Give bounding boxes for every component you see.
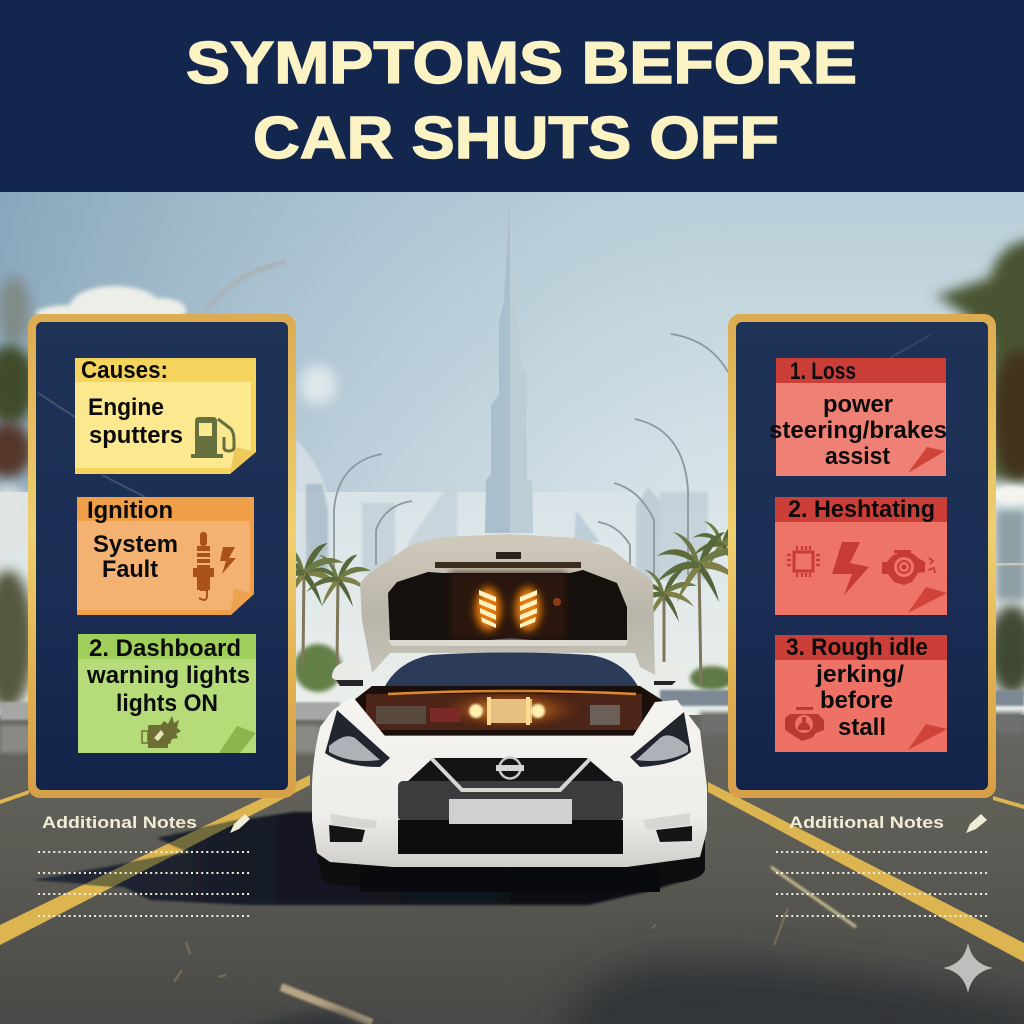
note: loss of power assist: assist — [825, 443, 890, 470]
note: dashboard warning lights: 2. Dashboard — [89, 635, 241, 662]
note: engine sputters: sputters — [89, 422, 183, 449]
title banner — [0, 0, 1024, 192]
note: rough idle: 3. Rough idle — [786, 634, 928, 661]
icon: lightning bolt — [832, 542, 869, 595]
title: SYMPTOMS BEFORE — [186, 30, 857, 96]
note: dashboard warning lights: lights ON — [116, 690, 218, 717]
note: hesitating: 2. Heshtating — [788, 496, 935, 523]
windshield — [383, 652, 640, 690]
note: hesitating — [775, 496, 947, 615]
icon: spark plug — [193, 532, 236, 600]
additional notes: right — [776, 813, 988, 916]
note: rough idle: stall — [838, 714, 886, 741]
icon: engine rough — [785, 707, 824, 741]
headlights — [325, 710, 691, 767]
wheels — [314, 840, 705, 892]
note: rough idle — [775, 634, 947, 752]
icon: pencil — [230, 814, 250, 833]
title: CAR SHUTS OFF — [253, 105, 779, 171]
hood inner lining — [388, 552, 628, 646]
note: loss of power assist: steering/brakes — [769, 417, 947, 444]
Nissan logo — [496, 758, 524, 778]
additional notes: left: Additional Notes — [42, 813, 197, 832]
background: road with lane lines and car shadow — [0, 690, 1024, 1024]
note: loss of power assist: 1. Loss — [790, 358, 856, 385]
note: engine sputters: Engine — [88, 394, 164, 421]
note: dashboard warning lights: warning lights — [86, 662, 250, 689]
engine bay — [354, 686, 662, 735]
icon: spark bolt — [220, 547, 236, 574]
note: loss of power assist: power — [823, 391, 893, 418]
note: engine sputters: Causes: — [81, 357, 168, 384]
front body — [312, 697, 707, 867]
additional notes: right: Additional Notes — [789, 813, 944, 832]
icon: warning light — [142, 716, 181, 748]
additional notes: left — [38, 813, 252, 916]
warning chevron lights — [475, 587, 561, 631]
note: dashboard warning lights — [78, 634, 256, 753]
note: ignition system fault: Fault — [102, 556, 158, 583]
panel: symptoms — [728, 314, 996, 798]
background: sky and skyline — [0, 192, 1024, 732]
title — [186, 30, 857, 171]
icon: engine — [882, 550, 935, 585]
note: ignition system fault — [77, 497, 254, 615]
note: rough idle: before — [820, 687, 893, 714]
note: engine sputters — [75, 357, 256, 474]
icon: pencil — [966, 814, 987, 833]
front grille — [398, 758, 623, 854]
icon: fuel pump — [191, 417, 234, 458]
background: blurred scenery at edges — [0, 240, 1024, 710]
note: loss of power assist — [769, 358, 947, 476]
note: rough idle: jerking/ — [815, 661, 904, 688]
note: ignition system fault: Ignition — [87, 497, 173, 524]
background: palm trees behind car — [266, 521, 753, 692]
panel: causes — [28, 314, 296, 798]
open hood — [360, 534, 655, 675]
note: ignition system fault: System — [93, 531, 178, 558]
icon: sparkle mark — [943, 943, 993, 993]
mirrors — [332, 661, 684, 686]
icon: chip — [787, 546, 820, 577]
fog lights — [329, 813, 692, 842]
car with open hood — [312, 534, 707, 892]
